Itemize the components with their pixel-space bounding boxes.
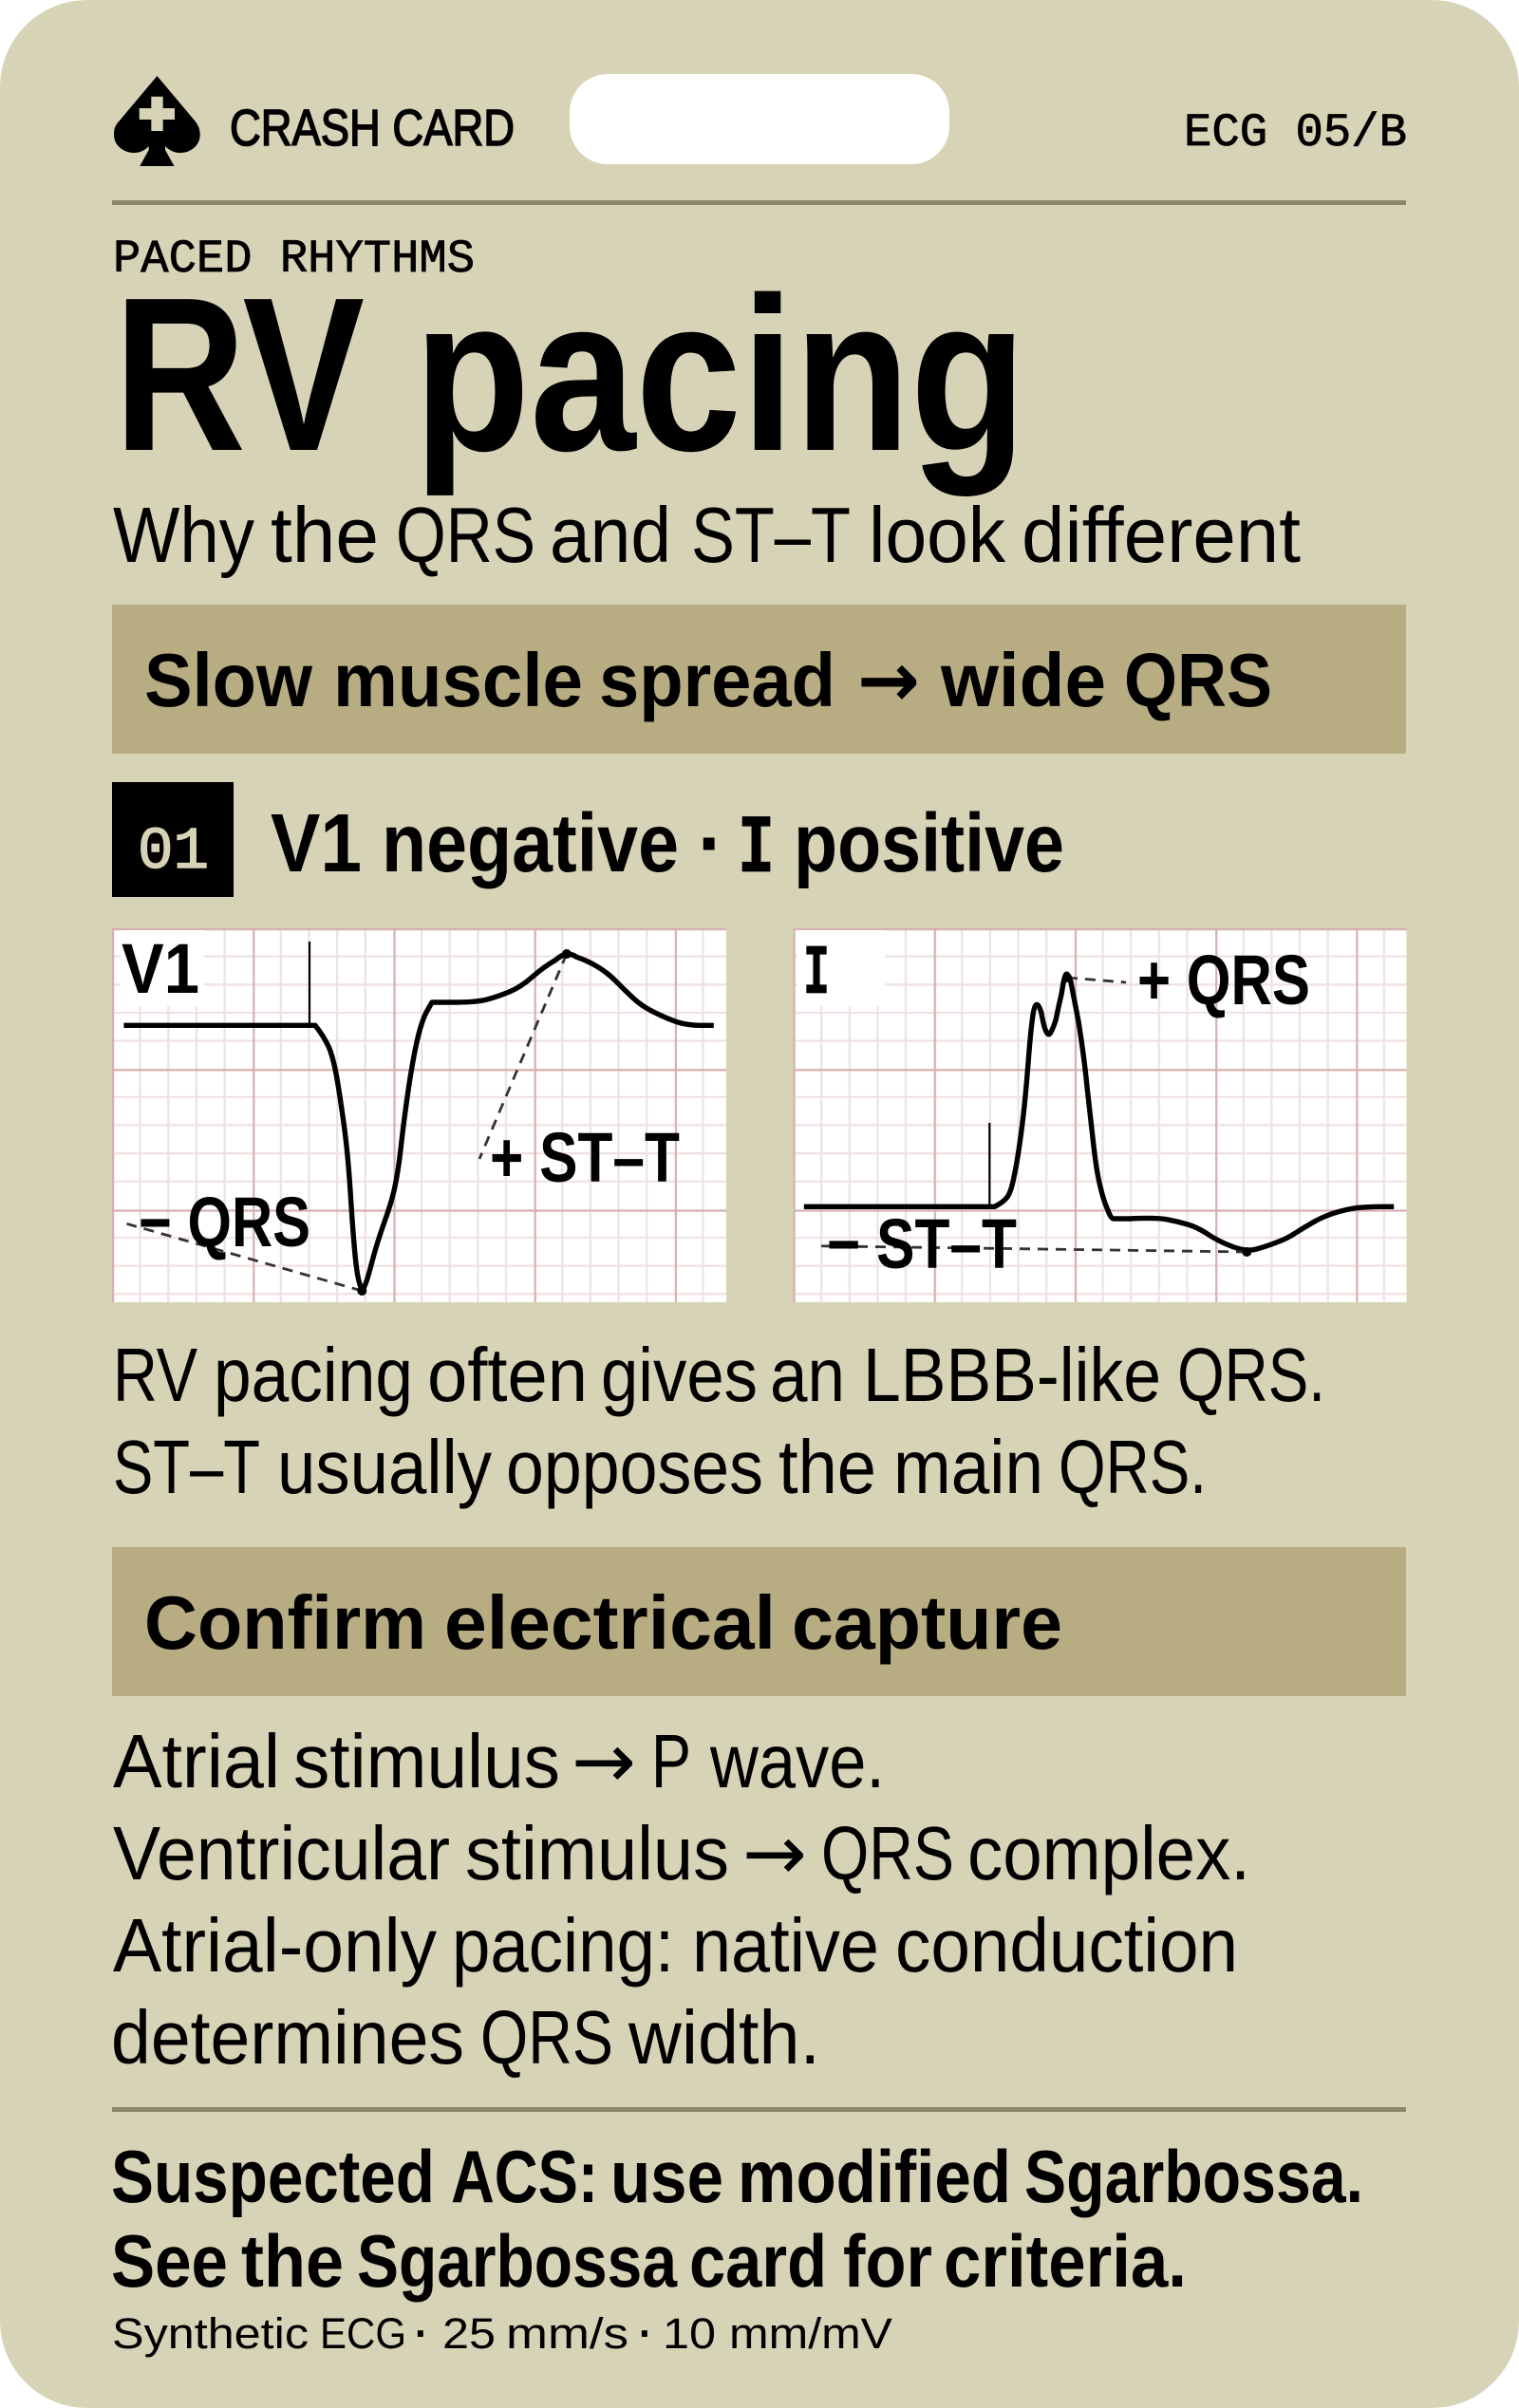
footer warning <box>111 2135 1363 2303</box>
subtitle: and <box>550 491 671 579</box>
footer warning: Sgarbossa. <box>1024 2135 1363 2218</box>
banner: confirm electrical capture: capture <box>792 1580 1062 1665</box>
lead I callouts: + QRS <box>1137 941 1310 1019</box>
text block: RV pacing explanation: QRS. <box>1177 1333 1325 1417</box>
footer warning: Sgarbossa <box>357 2219 678 2303</box>
text block: RV pacing explanation: opposes <box>506 1425 763 1509</box>
V1 trace <box>123 954 714 1290</box>
text block: capture rules: stimulus <box>293 1719 560 1803</box>
step badge 01: 01 <box>138 818 209 886</box>
subtitle: ST–T <box>691 491 851 579</box>
text block: RV pacing explanation: ST–T <box>113 1425 260 1509</box>
V1 callouts: − QRS <box>139 1183 310 1261</box>
text block: capture rules: Atrial <box>113 1719 280 1803</box>
section heading: negative <box>382 797 679 889</box>
footer warning: use <box>610 2135 723 2218</box>
text block: capture rules: P <box>651 1719 691 1803</box>
subtitle: different <box>1022 491 1301 579</box>
section heading: · <box>698 797 724 889</box>
banner: confirm electrical capture <box>112 1547 1406 1696</box>
section heading: positive <box>794 797 1064 889</box>
footer warning: for <box>843 2219 932 2303</box>
text block: RV pacing explanation: LBBB-like <box>863 1333 1161 1417</box>
text block: RV pacing explanation: QRS. <box>1059 1425 1207 1509</box>
text block: capture rules: determines <box>111 1995 464 2080</box>
V1 callouts <box>127 949 680 1296</box>
footnote: 25 <box>442 2309 496 2358</box>
text block: capture rules: → <box>742 1809 807 1897</box>
text block: RV pacing explanation: pacing <box>214 1333 413 1417</box>
step badge 01 <box>112 782 234 897</box>
text block: capture rules <box>111 1717 1250 2080</box>
text block: capture rules: complex. <box>967 1811 1250 1895</box>
title <box>114 252 1026 496</box>
text block: capture rules: Atrial-only <box>113 1903 437 1988</box>
footnote: 10 <box>663 2309 716 2358</box>
footnote: · <box>415 2309 428 2358</box>
banner: slow muscle spread: muscle <box>333 638 583 722</box>
banner: confirm electrical capture: electrical <box>444 1580 776 1665</box>
title: pacing <box>414 252 1026 496</box>
text block: capture rules: wave. <box>709 1719 885 1803</box>
title: RV <box>114 252 365 496</box>
footnote: mm/mV <box>729 2309 892 2358</box>
panel: lead V1 ECG <box>112 928 726 1302</box>
text block: capture rules: QRS <box>480 1995 613 2080</box>
text block: RV pacing explanation: usually <box>277 1425 492 1509</box>
banner: slow muscle spread: wide <box>940 638 1106 722</box>
footer warning: modified <box>738 2135 1011 2218</box>
text block: RV pacing explanation: the <box>778 1425 876 1509</box>
subtitle: look <box>869 491 1005 579</box>
banner: slow muscle spread: → <box>857 636 920 724</box>
text block: capture rules: Ventricular <box>113 1811 450 1895</box>
footnote: mm/s <box>506 2309 628 2358</box>
text block: RV pacing explanation <box>113 1333 1325 1509</box>
header rule <box>112 200 1406 205</box>
lead I trace <box>804 974 1394 1250</box>
text block: RV pacing explanation: often <box>427 1333 588 1417</box>
text block: capture rules: conduction <box>895 1903 1238 1988</box>
lead I callouts <box>816 941 1310 1283</box>
text block: capture rules: pacing: <box>452 1903 674 1988</box>
text block: capture rules: width. <box>628 1995 820 2080</box>
text block: capture rules: → <box>572 1717 636 1805</box>
panel: lead I ECG <box>794 928 1407 1302</box>
footer warning: See <box>111 2219 228 2303</box>
text block: RV pacing explanation: RV <box>113 1333 198 1417</box>
banner: slow muscle spread: QRS <box>1124 638 1272 722</box>
footer warning: ACS: <box>451 2135 598 2218</box>
V1 lead label: V1 <box>122 929 199 1008</box>
section heading: V1 <box>271 797 362 889</box>
subtitle: Why <box>113 491 254 579</box>
pacing spike <box>309 942 310 1025</box>
text block: RV pacing explanation: an <box>770 1333 845 1417</box>
banner: slow muscle spread <box>112 605 1406 754</box>
category label: PACED RHYTHMS <box>113 233 475 286</box>
footnote <box>112 2309 892 2358</box>
footer rule <box>112 2107 1406 2112</box>
text block: capture rules: QRS <box>821 1811 954 1895</box>
banner: confirm electrical capture: Confirm <box>144 1580 426 1665</box>
lead I callouts: − ST–T <box>827 1204 1017 1283</box>
text block: RV pacing explanation: main <box>893 1425 1043 1509</box>
footer warning: the <box>241 2219 344 2303</box>
icon: spade with medical cross <box>114 76 200 166</box>
lanyard slot <box>570 74 949 164</box>
subtitle: QRS <box>396 491 535 579</box>
pacing spike <box>988 1123 990 1206</box>
footer warning: Suspected <box>111 2135 435 2218</box>
banner: slow muscle spread: Slow <box>144 638 313 722</box>
brand label: CRASH CARD <box>230 100 515 157</box>
subtitle: the <box>271 491 379 579</box>
text block: RV pacing explanation: gives <box>601 1333 758 1417</box>
section heading <box>271 797 1064 897</box>
footer warning: card <box>689 2219 827 2303</box>
text block: capture rules: stimulus <box>465 1811 729 1895</box>
section heading: I <box>738 804 775 897</box>
text block: capture rules: native <box>692 1903 879 1988</box>
footnote: ECG <box>320 2309 406 2358</box>
subtitle <box>113 491 1301 579</box>
footnote: Synthetic <box>112 2309 309 2358</box>
footnote: · <box>639 2309 652 2358</box>
footer warning: criteria. <box>944 2219 1187 2303</box>
card code: ECG 05/B <box>1184 106 1407 159</box>
I lead label: I <box>803 935 830 1015</box>
V1 callouts: + ST–T <box>490 1118 680 1197</box>
banner: slow muscle spread: spread <box>599 638 835 722</box>
